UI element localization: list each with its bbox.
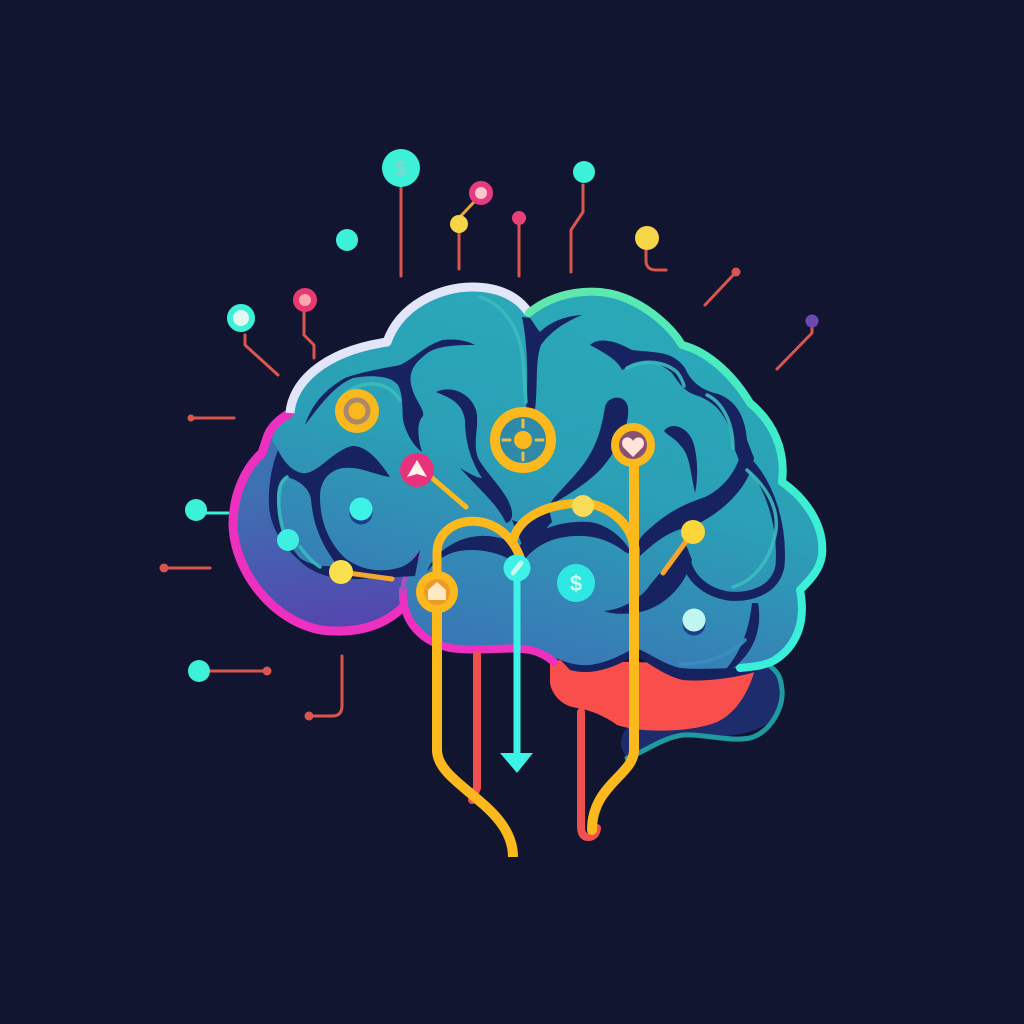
centre right fold (550, 398, 628, 505)
green rim (529, 292, 822, 668)
upper left fold (305, 339, 475, 452)
lower branch fold (604, 545, 692, 614)
yellow circuit paths (341, 465, 693, 857)
right hook fold (664, 426, 697, 493)
branch fold (639, 442, 754, 556)
brain body (233, 285, 822, 676)
lower centre arch fold (427, 522, 633, 572)
arch gap fold (512, 505, 552, 552)
left purple lobe (230, 413, 420, 633)
white rim (290, 287, 529, 413)
purple transition rim (403, 556, 418, 592)
left dark fold blob (269, 446, 420, 579)
upper right fold (590, 341, 754, 468)
lower brainstem shape (621, 666, 782, 758)
small inner left lobe (277, 477, 337, 566)
pink rim middle lobe (403, 590, 554, 662)
cyan arrow (500, 570, 533, 773)
bottom right fold (720, 603, 759, 676)
pink rim (233, 413, 403, 631)
icon nodes inside brain (277, 389, 706, 636)
round lobe ring fold (686, 462, 780, 596)
cerebellum red (550, 660, 756, 731)
center left fold (436, 389, 512, 523)
outer nodes: $ (395, 156, 407, 181)
icon nodes inside brain: $ (570, 571, 582, 596)
dark band beneath brain (553, 630, 760, 681)
red lower lines (472, 655, 597, 837)
outer nodes (160, 149, 818, 720)
lobe highlights (279, 297, 776, 664)
midline fold (522, 315, 582, 410)
red connector lines (164, 185, 812, 716)
